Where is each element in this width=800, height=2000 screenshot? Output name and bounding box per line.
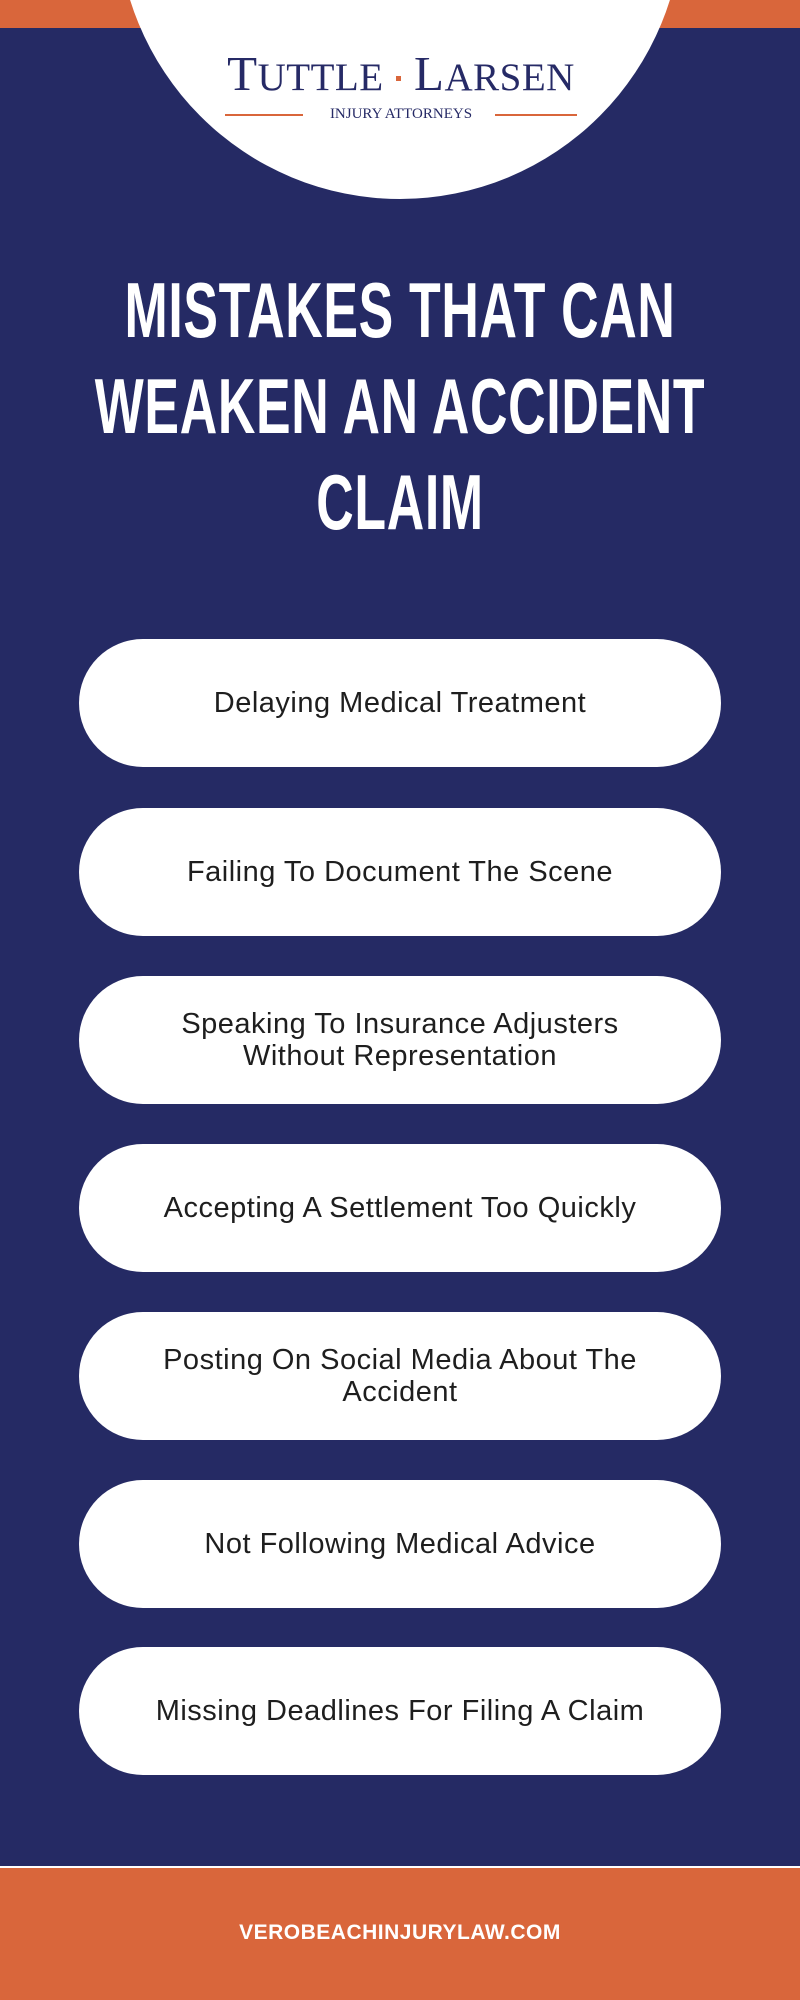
pill 2 [79,808,721,936]
title [94,266,705,546]
pill 3: Speaking To Insurance Adjusters [181,1008,619,1040]
pill 5: Posting On Social Media About The [163,1344,637,1376]
pill 3: Without Representation [243,1040,557,1072]
pill 5: Accident [342,1376,458,1408]
title: MISTAKES THAT CAN [124,266,676,354]
pill 4 [79,1144,721,1272]
pill 3 [79,976,721,1104]
pill 1 [79,639,721,767]
logo: TUTTLE LARSEN [227,46,575,101]
pill 1: Delaying Medical Treatment [214,687,586,719]
pill 6 [79,1480,721,1608]
pill 7 [79,1647,721,1775]
footer: VEROBEACHINJURYLAW.COM [239,1921,561,1944]
pill 6: Not Following Medical Advice [204,1528,596,1560]
title: CLAIM [316,458,484,546]
pill 2: Failing To Document The Scene [187,856,613,888]
top orange bar [0,0,800,28]
logo circle [117,0,683,199]
pill 5 [79,1312,721,1440]
footer [0,1866,800,2000]
pill 4: Accepting A Settlement Too Quickly [164,1192,636,1224]
pill 7: Missing Deadlines For Filing A Claim [156,1695,644,1727]
title: WEAKEN AN ACCIDENT [95,362,705,450]
logo: INJURY ATTORNEYS [330,106,472,122]
